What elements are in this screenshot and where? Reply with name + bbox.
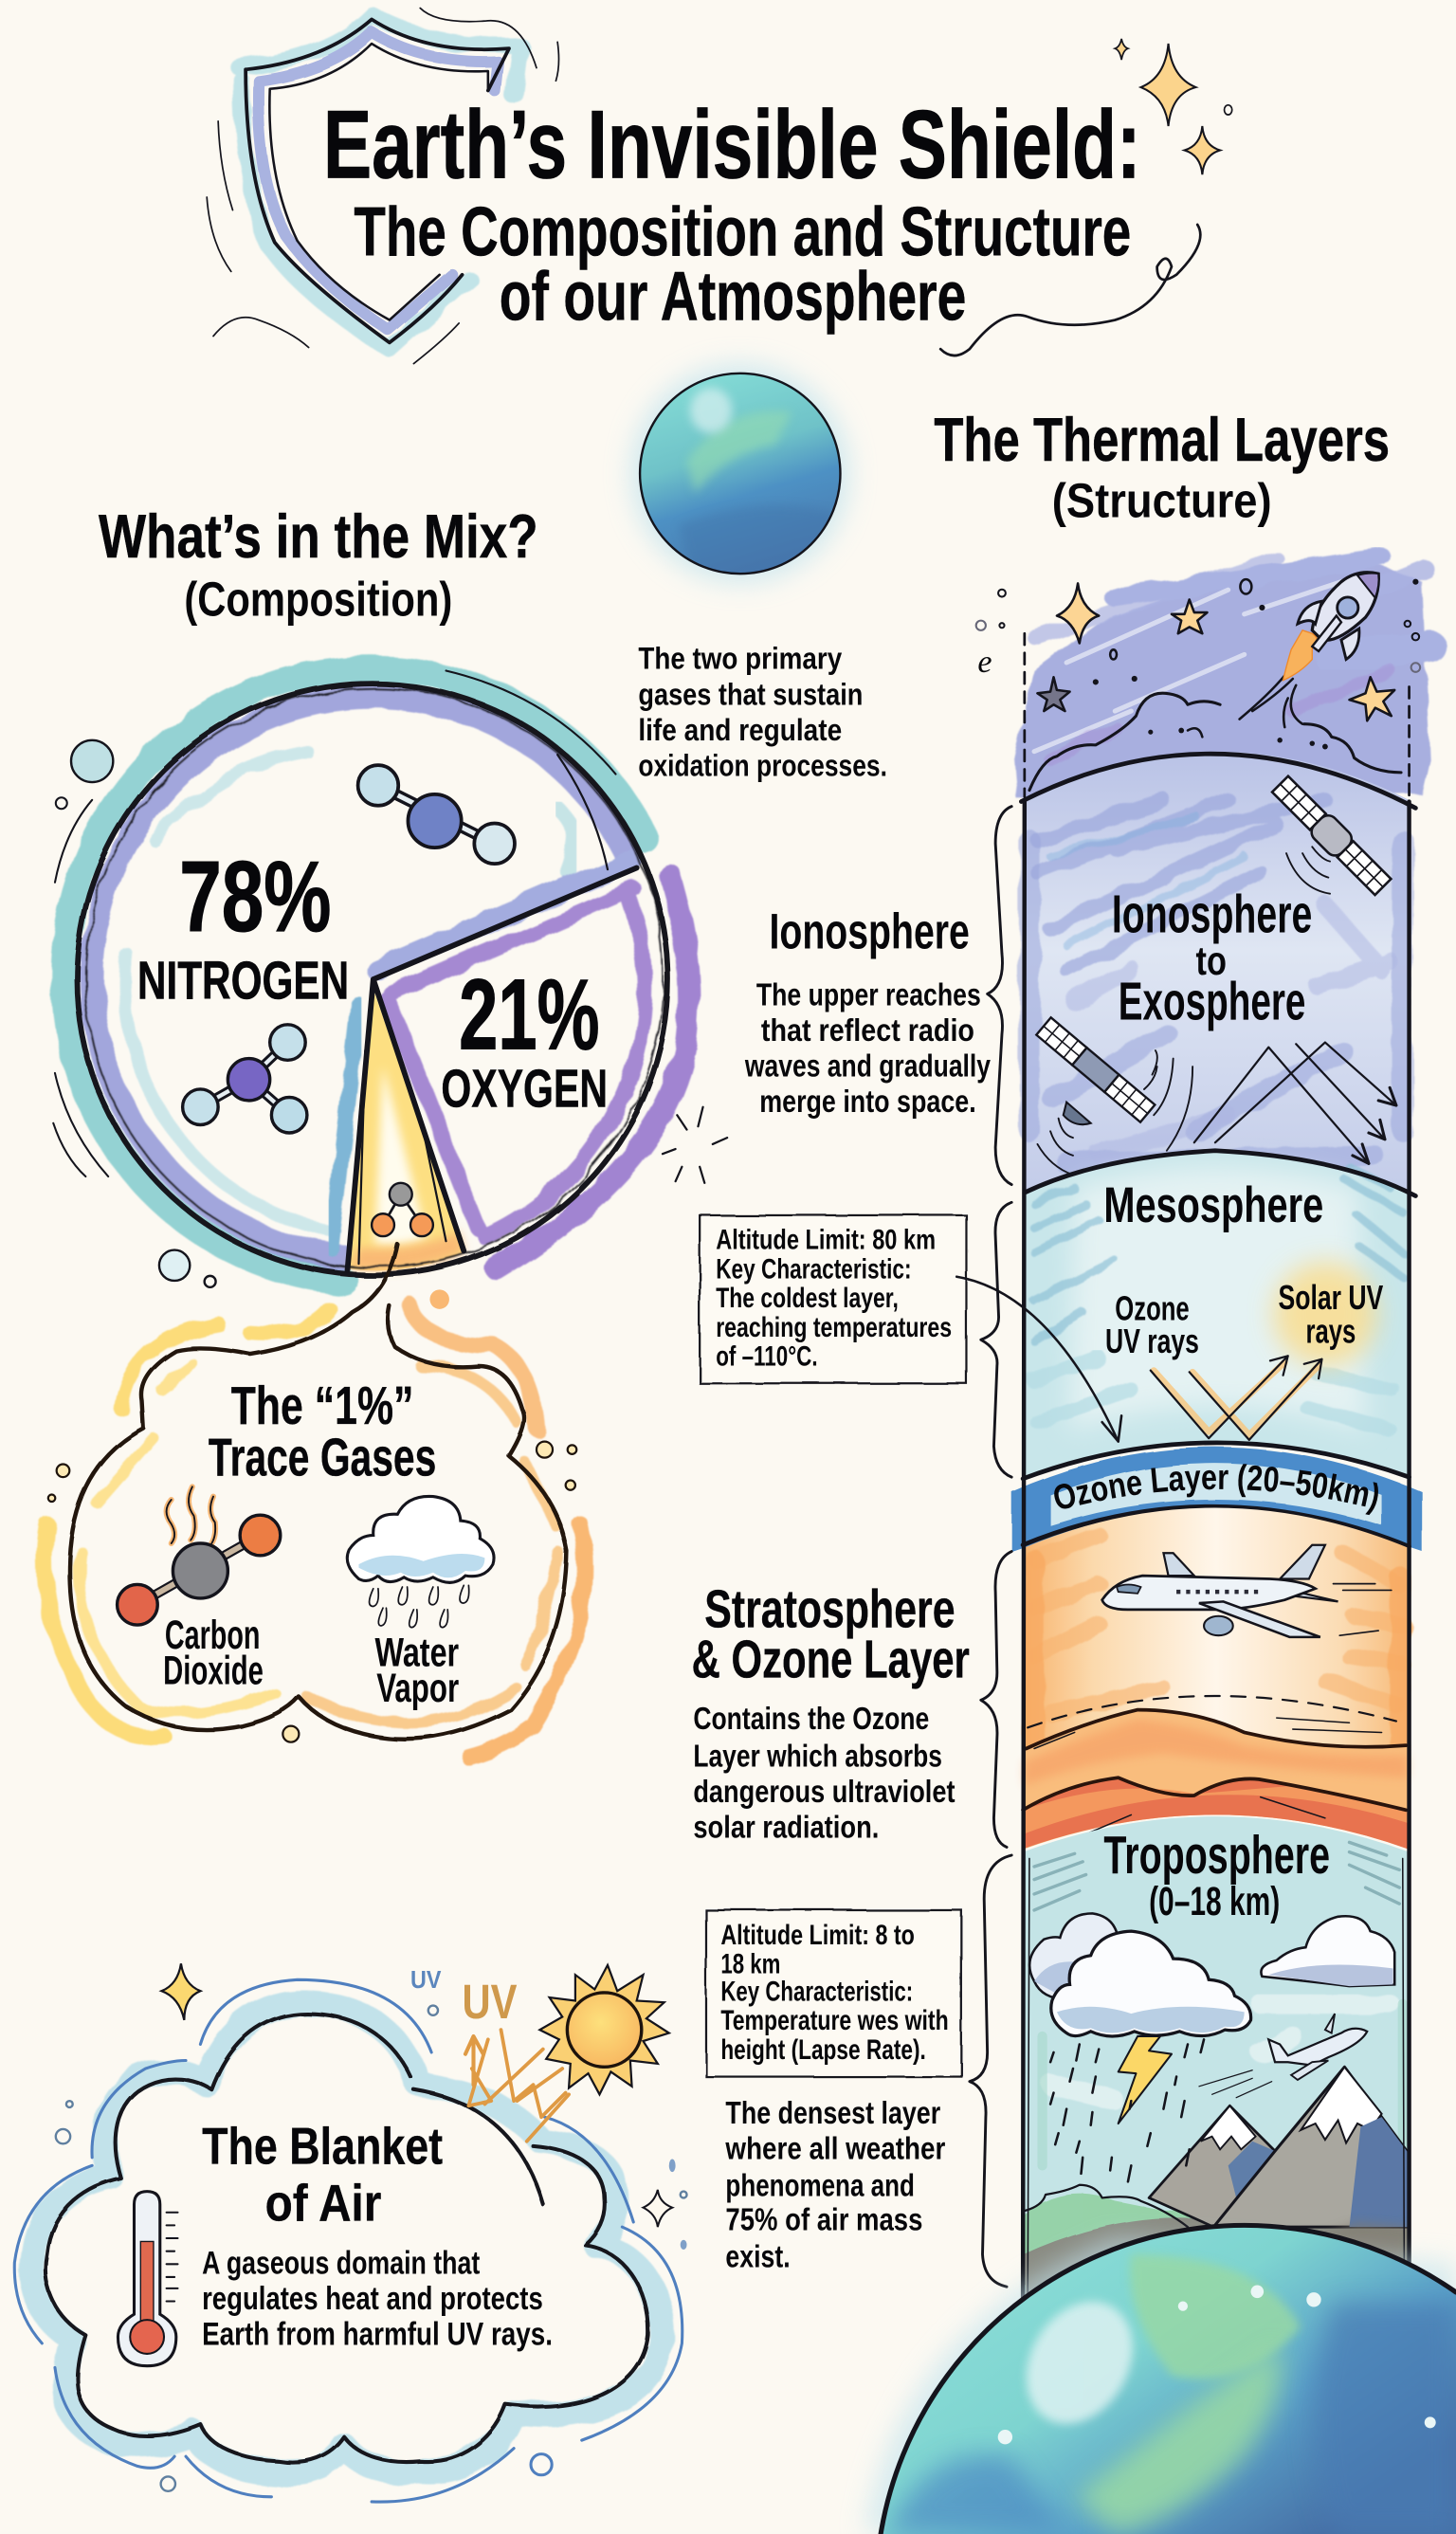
icon: ammonia style molecule (183, 1025, 307, 1133)
label: carbon dioxide (163, 1613, 264, 1693)
text: troposphere description: The densest layer (725, 2096, 940, 2131)
pie chart: composition (64, 668, 689, 1282)
label: carbon dioxide: Dioxide (163, 1648, 264, 1693)
text: stratosphere description: Contains the Ozone (693, 1702, 929, 1737)
text: blanket description (202, 2246, 553, 2353)
icon: sun with UV arrows: UV (463, 1975, 518, 2029)
icon: trace gas molecule (372, 1183, 433, 1236)
label: ozone uv rays (1105, 1290, 1199, 1360)
callout: troposphere facts: Key Characteristic: (720, 1976, 913, 2007)
layer: space and exosphere top: e (977, 645, 992, 680)
label: ionosphere to exosphere (1112, 884, 1312, 1031)
ozone layer label: Ozone Layer (20–50km) (1054, 1464, 1378, 1515)
bracket: mesosphere (981, 1202, 1011, 1477)
icon: airliner (1102, 1545, 1392, 1637)
sun glow (1273, 1262, 1376, 1365)
callout: troposphere facts: height (Lapse Rate). (720, 2034, 926, 2066)
trace cloud outline (69, 1245, 567, 1739)
text: blanket description: regulates heat and protects (202, 2281, 543, 2317)
callout: troposphere facts: Altitude Limit: 8 to (720, 1920, 915, 1951)
label: solar uv rays: rays (1305, 1313, 1356, 1351)
heading: composition (99, 501, 538, 626)
heading: composition: (Composition) (184, 572, 452, 626)
text: troposphere description: 75% of air mass (725, 2203, 922, 2238)
label: mesosphere: Mesosphere (1103, 1177, 1323, 1233)
label: ionosphere to exosphere: Ionosphere (1112, 884, 1312, 944)
icon: nitrogen molecule (358, 765, 515, 864)
icon: carbon dioxide molecule (118, 1486, 281, 1625)
label: ionosphere to exosphere: to (1196, 939, 1227, 984)
icon: mountains and ground (1025, 2065, 1407, 2294)
title: of our Atmosphere (500, 258, 966, 336)
decoration: blanket sparkles and bubbles (56, 1963, 687, 2491)
text: ionosphere description: waves and gradually (744, 1048, 991, 1084)
label: water vapor (375, 1631, 459, 1711)
label: oxygen 21 percent: 21% (459, 958, 599, 1070)
label: troposphere: (0–18 km) (1149, 1879, 1280, 1924)
label: nitrogen 78 percent: 78% (179, 841, 331, 953)
text: ionosphere description (744, 904, 991, 1120)
heading: thermal layers (934, 405, 1390, 528)
text: troposphere description: exist. (725, 2240, 791, 2275)
label: troposphere: Troposphere (1103, 1825, 1330, 1885)
label: water vapor: Water (375, 1631, 459, 1676)
bracket: troposphere (970, 1855, 1011, 2287)
panel: trace gases cloud (44, 1245, 585, 1757)
bracket: stratosphere (981, 1552, 1011, 1847)
trace cloud watercolor (44, 1289, 585, 1757)
label: ionosphere to exosphere: Exosphere (1119, 972, 1305, 1031)
text: primary gases note: The two primary (638, 642, 842, 676)
diagram: atmosphere column (974, 547, 1448, 2298)
layer: space and exosphere top (976, 557, 1430, 800)
icon: sun with UV arrows: UV (410, 1967, 441, 1994)
text: ionosphere description: merge into space. (759, 1085, 976, 1120)
icon: rain cloud (347, 1496, 494, 1628)
icon: small plane (1199, 2014, 1367, 2098)
text: troposphere description: where all weather (725, 2132, 945, 2167)
text: troposphere description: phenomena and (725, 2169, 915, 2204)
callout: mesosphere facts: Altitude Limit: 80 km (716, 1225, 936, 1256)
text: stratosphere description: Stratosphere (704, 1579, 956, 1639)
callout: troposphere facts: 18 km (720, 1948, 780, 1979)
label: solar uv rays (1278, 1279, 1383, 1351)
label: ozone uv rays: Ozone (1115, 1290, 1190, 1328)
callout: troposphere facts (706, 1910, 961, 2077)
heading: blanket of air: of Air (265, 2174, 381, 2232)
decoration: title sparkles and swirl (940, 39, 1232, 355)
arrow: callout to ozone layer (956, 1277, 1121, 1442)
icon: lightning (1119, 2036, 1172, 2124)
callout: troposphere facts: Temperature wes with (720, 2005, 949, 2036)
text: stratosphere description: & Ozone Layer (692, 1629, 970, 1688)
text: stratosphere description: Layer which absorbs (693, 1739, 942, 1774)
callout: mesosphere facts (700, 1215, 966, 1383)
icon: upper satellite (1270, 774, 1393, 897)
text: blanket description: A gaseous domain that (202, 2246, 480, 2282)
icon: rocket (1283, 573, 1379, 681)
label: ozone uv rays: UV rays (1105, 1322, 1199, 1360)
layer: stratosphere (1023, 1508, 1410, 1849)
text: stratosphere description: solar radiation. (693, 1810, 879, 1845)
decoration: bubbles around pie (53, 670, 727, 1287)
heading: blanket of air: The Blanket (202, 2118, 443, 2176)
heading: trace gases: Trace Gases (209, 1427, 436, 1486)
text: ionosphere description: The upper reaches (756, 977, 981, 1012)
blanket cloud outline (46, 2014, 648, 2463)
pie outlines (77, 684, 668, 1275)
heading: trace gases: The “1%” (231, 1376, 413, 1435)
panel: blanket of air cloud (14, 1963, 687, 2502)
callout: mesosphere facts: The coldest layer, (716, 1283, 899, 1314)
column walls (1023, 800, 1410, 2303)
bracket: ionosphere (988, 807, 1011, 1185)
text: stratosphere description: dangerous ultraviolet (693, 1775, 956, 1810)
label: troposphere (1103, 1825, 1330, 1924)
callout: mesosphere facts: of –110°C. (716, 1340, 818, 1372)
heading: thermal layers: (Structure) (1052, 474, 1272, 528)
icon: small earth globe (630, 364, 850, 583)
icon: large earth globe (864, 2225, 1456, 2534)
label: oxygen 21 percent (441, 958, 608, 1119)
oxygen slice wash (388, 874, 689, 1268)
text: primary gases note (638, 642, 887, 782)
layer: mesosphere (1023, 1151, 1415, 1479)
heading: blanket of air (202, 2118, 443, 2232)
label: oxygen 21 percent: OXYGEN (441, 1059, 608, 1119)
label: nitrogen 78 percent: NITROGEN (137, 951, 349, 1011)
text: blanket description: Earth from harmful UV rays. (202, 2317, 553, 2353)
icon: thermometer (118, 2192, 178, 2366)
icon: storm clouds (1029, 1913, 1394, 2124)
title (323, 90, 1141, 336)
arrows: uv reflection (1151, 1356, 1322, 1440)
blanket cloud watercolor (32, 2003, 662, 2472)
nitrogen slice wash (64, 668, 646, 1282)
icon: sun with UV arrows (410, 1965, 669, 2142)
layer: ionosphere to exosphere (1021, 752, 1415, 1193)
text: primary gases note: oxidation processes. (638, 748, 887, 782)
label: nitrogen 78 percent (137, 841, 349, 1011)
heading: composition: What’s in the Mix? (99, 501, 538, 571)
label: carbon dioxide: Carbon (165, 1613, 260, 1658)
icon: rain (1050, 2039, 1204, 2181)
callout: mesosphere facts: reaching temperatures (716, 1312, 952, 1343)
layer: troposphere (1023, 1816, 1410, 2327)
text: ionosphere description: that reflect radio (761, 1013, 974, 1048)
text: primary gases note: gases that sustain (638, 677, 863, 711)
title: The Composition and Structure (354, 192, 1131, 270)
text: ionosphere description: Ionosphere (769, 904, 970, 960)
icon: shield (207, 9, 559, 364)
title: Earth’s Invisible Shield: (323, 90, 1141, 199)
heading: trace gases (209, 1376, 436, 1486)
blanket cloud outer blue strokes (14, 1979, 682, 2502)
icon: lower satellite (1036, 1017, 1192, 1175)
text: stratosphere description (692, 1579, 970, 1845)
label: solar uv rays: Solar UV (1278, 1279, 1383, 1317)
text: primary gases note: life and regulate (638, 713, 842, 747)
callout: mesosphere facts: Key Characteristic: (716, 1253, 911, 1285)
layer: ozone band (1010, 1441, 1423, 1552)
decoration: trace cloud bubbles (48, 1442, 576, 1742)
text: troposphere description (725, 2096, 945, 2275)
trace gas slice (349, 989, 464, 1270)
icon: stars (1037, 583, 1394, 720)
arrows: reflected radio waves (1194, 1043, 1396, 1163)
label: water vapor: Vapor (376, 1666, 459, 1711)
